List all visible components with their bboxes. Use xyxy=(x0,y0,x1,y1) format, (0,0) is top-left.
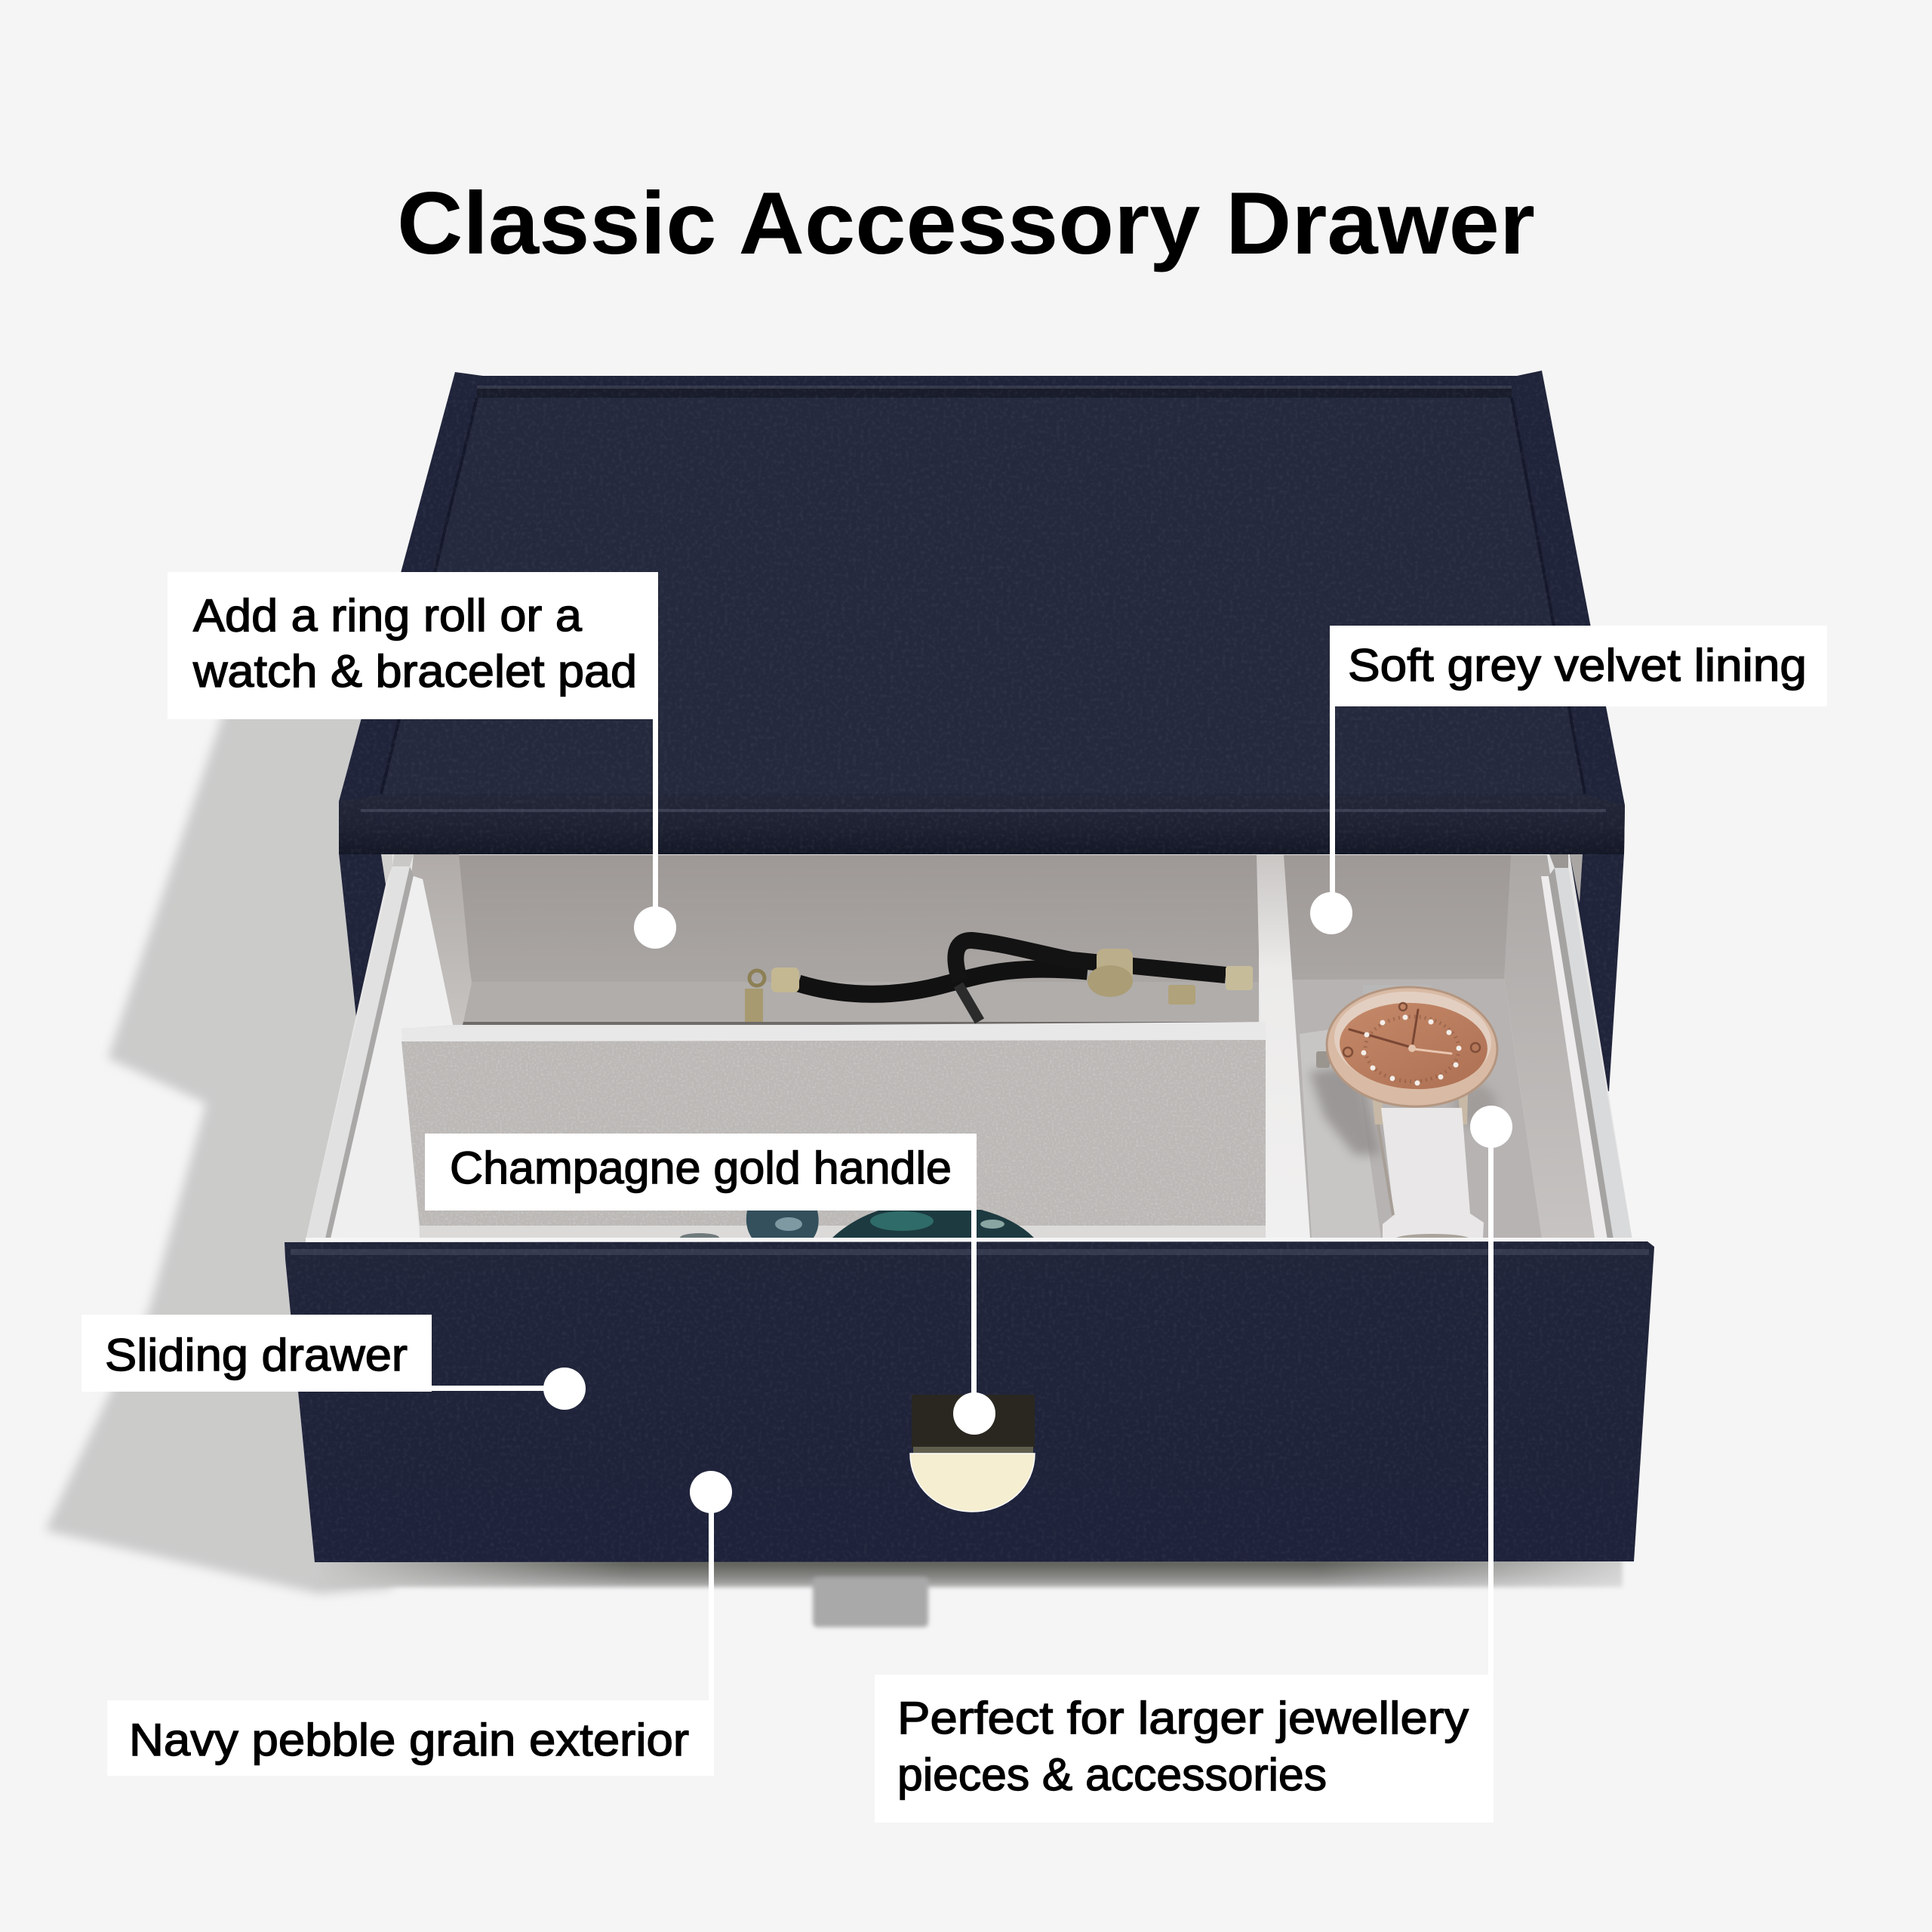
large shell xyxy=(832,1210,1034,1238)
leader line xyxy=(1488,1143,1494,1678)
callout: velvet lining xyxy=(1310,626,1827,934)
label box xyxy=(82,1315,432,1392)
numeral rings xyxy=(1343,1003,1480,1057)
slider face xyxy=(1088,965,1133,997)
floor of main compartment xyxy=(463,982,1259,1025)
leader line xyxy=(653,717,658,921)
dial xyxy=(1337,999,1490,1093)
end cap xyxy=(1226,966,1253,990)
watch shadow xyxy=(1309,1064,1381,1155)
label box xyxy=(107,1700,714,1776)
velvet texture xyxy=(401,1040,1266,1226)
bezel xyxy=(1332,988,1494,1092)
label box xyxy=(1330,626,1827,706)
front panel xyxy=(285,1241,1654,1562)
right compartment back wall xyxy=(1281,855,1512,980)
divider wall xyxy=(1257,855,1310,1238)
right rail xyxy=(1555,868,1632,1240)
leather grain xyxy=(339,371,1625,1091)
label line 2: pieces & accessories xyxy=(897,1749,1327,1800)
ring pad insert xyxy=(401,1022,1266,1238)
foot shadow xyxy=(813,1577,928,1627)
label box xyxy=(875,1675,1494,1823)
leader line xyxy=(709,1509,714,1703)
band highlight xyxy=(361,809,1606,812)
storage box body xyxy=(339,371,1625,1091)
label box xyxy=(425,1134,977,1211)
right rail gap xyxy=(1549,868,1615,1240)
teal highlight xyxy=(870,1211,934,1231)
handle xyxy=(910,1395,1035,1512)
label line 2: watch & bracelet pad xyxy=(192,646,637,697)
gold half circle xyxy=(910,1454,1035,1512)
label line 1: Perfect for larger jewellery xyxy=(897,1693,1469,1743)
leader line xyxy=(1330,702,1335,898)
dot xyxy=(953,1392,995,1435)
leather tab xyxy=(912,1395,1035,1447)
dial markers xyxy=(1361,1014,1461,1085)
callout: larger jewellery xyxy=(875,1106,1512,1823)
callout: ring roll xyxy=(168,572,676,949)
small silver bead xyxy=(680,1233,719,1242)
lid seam right xyxy=(1512,398,1585,794)
gold clasp ring xyxy=(749,971,764,986)
leader line xyxy=(429,1386,549,1391)
olive band xyxy=(913,1447,1033,1454)
right lug xyxy=(1458,1094,1468,1124)
label text: Navy pebble grain exterior xyxy=(129,1715,689,1765)
label text: Sliding drawer xyxy=(105,1330,408,1380)
contact shadow under drawer xyxy=(315,1559,1623,1587)
cord xyxy=(798,969,1088,994)
callout: exterior xyxy=(107,1471,732,1776)
back wall of main compartment xyxy=(457,855,1259,983)
cast shadow xyxy=(45,679,1623,1627)
right wall velvet edge xyxy=(1541,876,1607,1238)
front top edge xyxy=(306,1238,1638,1242)
left ring xyxy=(746,1211,819,1238)
watch xyxy=(1309,983,1500,1244)
drawer interior xyxy=(306,854,1632,1241)
top strap stub xyxy=(1363,985,1431,994)
left tab xyxy=(381,854,392,884)
ring highlight xyxy=(775,1217,802,1231)
shadow right xyxy=(1454,1084,1497,1127)
callout: sliding drawer xyxy=(82,1315,586,1410)
wall shadow xyxy=(45,679,392,1594)
pale highlight xyxy=(980,1220,1004,1229)
dot xyxy=(634,906,676,949)
braid tail xyxy=(958,985,980,1021)
right wall xyxy=(1504,855,1607,1238)
hands xyxy=(1349,1010,1451,1054)
lid back lip shadow xyxy=(477,386,1512,398)
label line 1: Add a ring roll or a xyxy=(193,590,583,641)
right rail dark top xyxy=(1549,854,1568,868)
tortoiseshell hair clip xyxy=(680,1210,1034,1242)
box silhouette xyxy=(339,371,1625,1091)
leader line xyxy=(971,1208,977,1396)
cord loop xyxy=(955,940,1226,981)
left white velvet top xyxy=(328,875,453,1238)
lid seam left xyxy=(381,398,477,794)
left rail xyxy=(306,866,410,1241)
case xyxy=(1324,983,1500,1111)
label box xyxy=(168,572,658,719)
right compartment light floor xyxy=(1300,1026,1381,1238)
left shaded wall xyxy=(411,854,472,1025)
right compartment floor xyxy=(1287,979,1542,1238)
dot xyxy=(1470,1106,1512,1148)
pad floor strip xyxy=(420,1226,1266,1238)
interior base xyxy=(306,854,1632,1240)
front band of lid xyxy=(339,795,1625,854)
dot xyxy=(1310,892,1352,934)
bracelet xyxy=(745,940,1253,1022)
gold clasp xyxy=(745,989,763,1022)
pad top ledge xyxy=(401,1022,1266,1041)
tick ring xyxy=(1365,1017,1459,1081)
dot xyxy=(543,1367,586,1410)
crown xyxy=(1316,1051,1330,1068)
slider body xyxy=(1097,949,1133,982)
drawer front xyxy=(285,1241,1654,1562)
label text: Champagne gold handle xyxy=(450,1143,952,1193)
top panel xyxy=(381,398,1585,794)
dot xyxy=(690,1471,732,1513)
callout: handle xyxy=(425,1134,995,1435)
label text: Soft grey velvet lining xyxy=(1348,640,1807,691)
lugs xyxy=(1372,1094,1383,1124)
strap keeper shadow xyxy=(1395,1234,1470,1244)
top edge sheen xyxy=(291,1249,1649,1255)
strap xyxy=(1381,1108,1484,1238)
bead xyxy=(1168,985,1195,1004)
floor front shadow xyxy=(463,1022,1259,1025)
title: Classic Accessory Drawer xyxy=(397,174,1535,272)
lid back lip highlight xyxy=(477,386,1512,389)
gold cap left xyxy=(771,968,799,992)
right tab xyxy=(1570,854,1583,903)
pad velvet face xyxy=(401,1040,1266,1226)
left rail upper section xyxy=(392,854,414,866)
front grain xyxy=(285,1241,1654,1562)
strap edge xyxy=(1378,1124,1393,1215)
left rail gap xyxy=(323,866,414,1238)
